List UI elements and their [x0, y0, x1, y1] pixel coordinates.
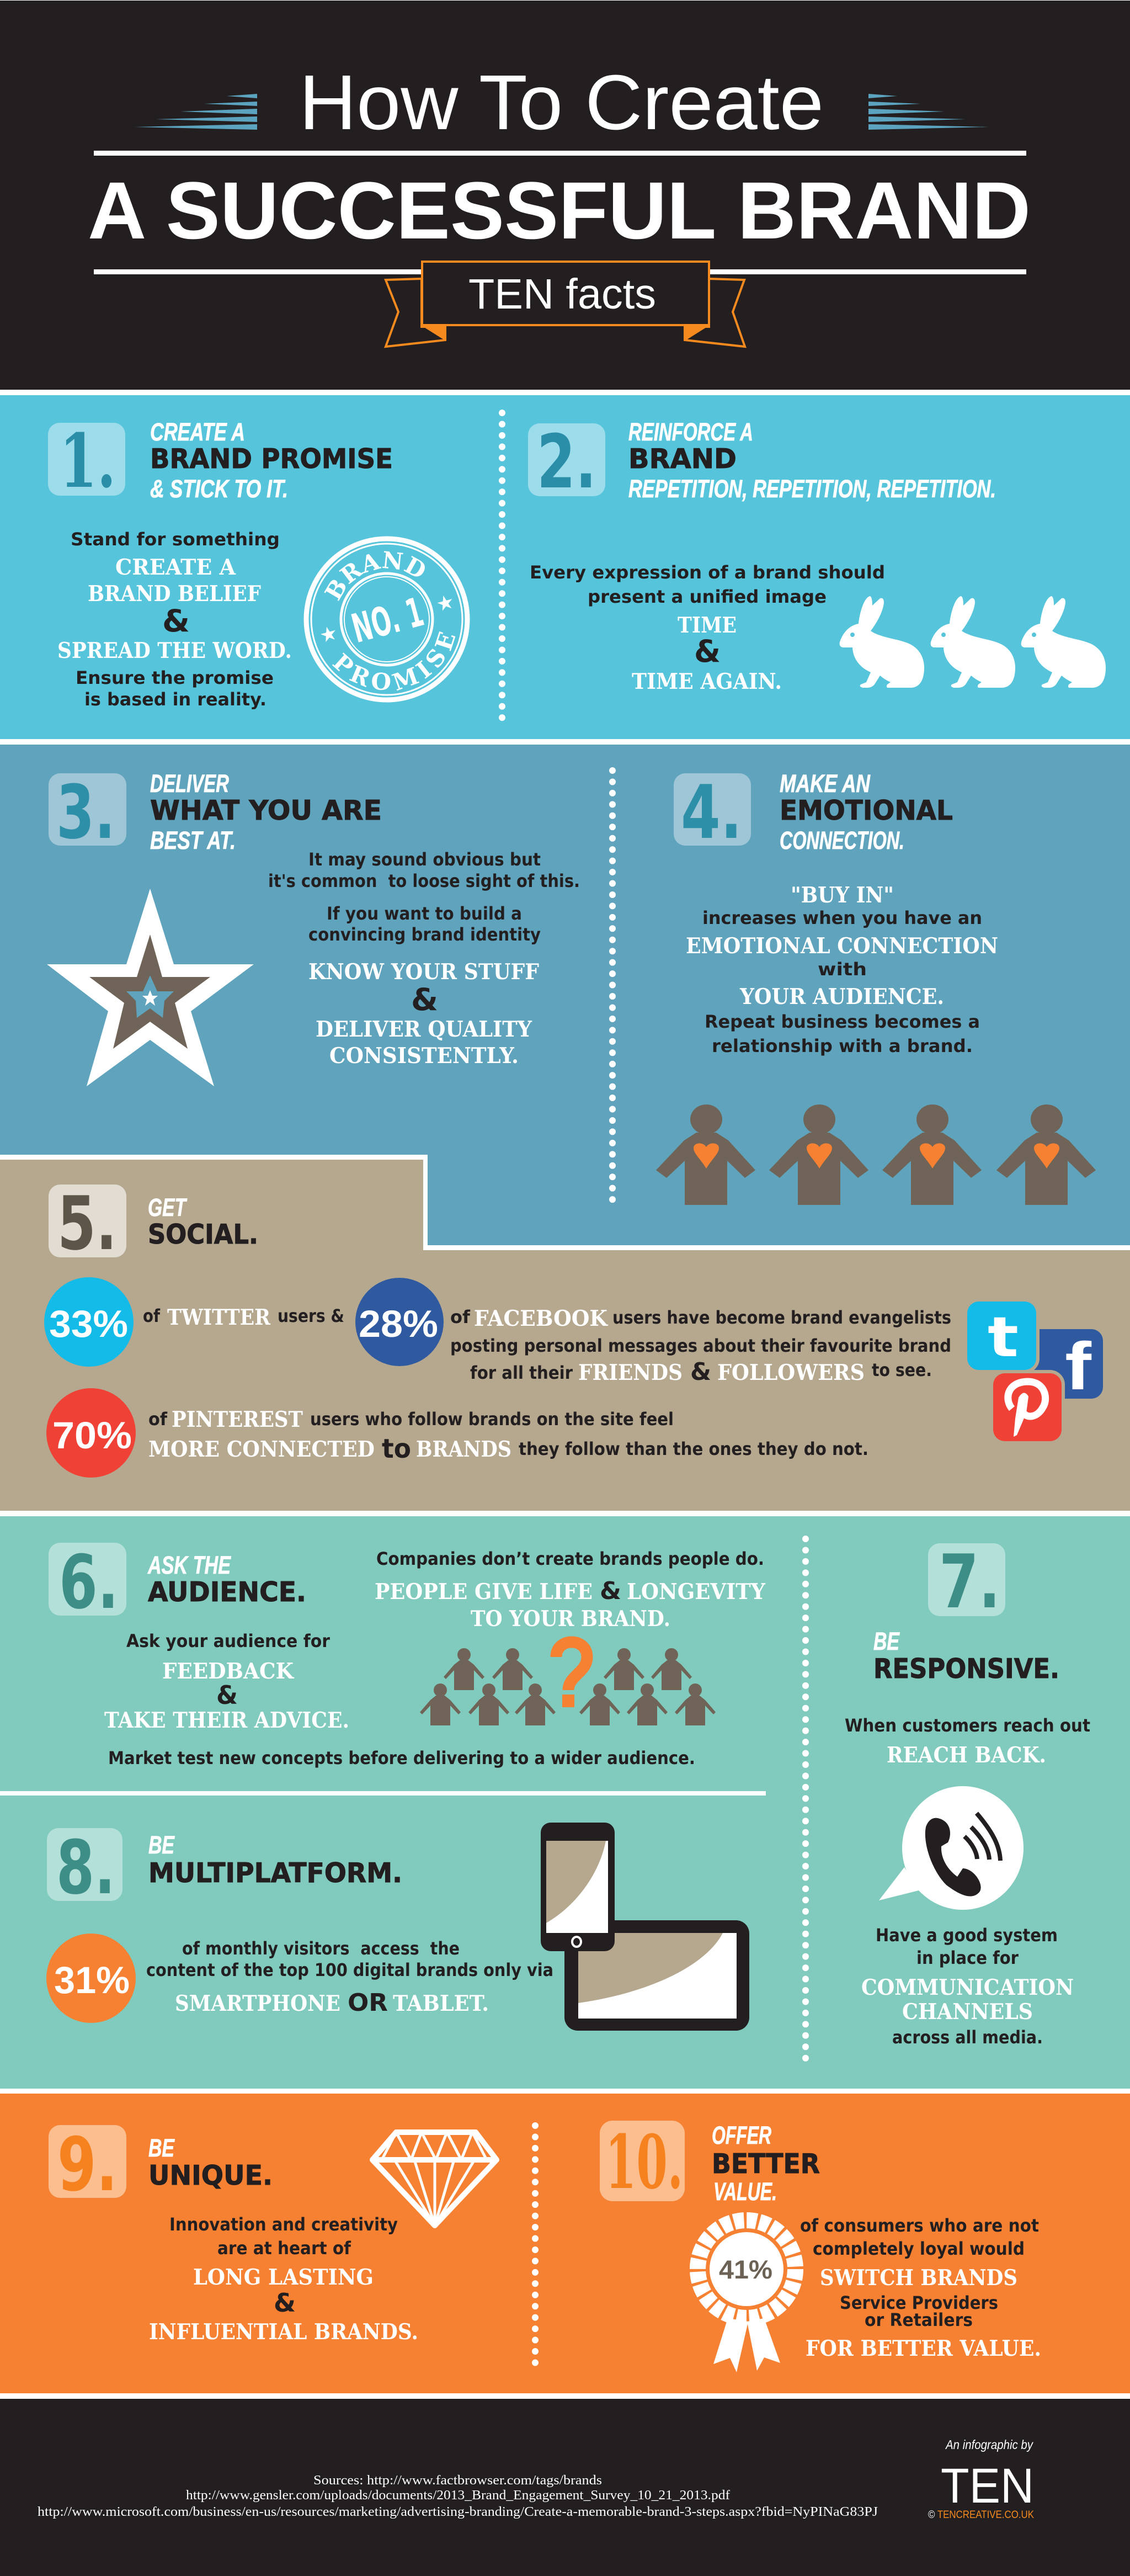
text block 7 top: REACH BACK. [887, 1743, 1046, 1768]
text block 3: If you want to build a [327, 903, 522, 924]
text block 8: OR [348, 1989, 388, 2017]
number tile 3: 3. [56, 769, 115, 856]
heading 5: SOCIAL. [148, 1219, 258, 1250]
text: pinterest users: to [382, 1433, 411, 1464]
number tile 8: 8. [56, 1825, 115, 1911]
text block 3: KNOW YOUR STUFF [308, 959, 539, 985]
text: sources: http://www.gensler.com/uploads/documents/2013_Brand_Engagement_Survey_10_21_2013.pdf [186, 2488, 730, 2503]
text block 4: Repeat business becomes a [705, 1011, 980, 1032]
icon: smartphone [541, 1823, 615, 1951]
heading 10: BETTER [712, 2148, 820, 2180]
panel: header [0, 1, 1130, 390]
text block 1: & [162, 603, 190, 639]
icon: rosette with 41 percent [699, 2221, 795, 2372]
stat: 70 percent pinterest: 70% [52, 1414, 132, 1457]
heading 2: REINFORCE A [628, 418, 753, 446]
title line: How To Create: How To Create [299, 59, 824, 146]
text block 6 top: & [600, 1577, 621, 1605]
text block 6 left: & [216, 1680, 238, 1710]
text block 6 top [375, 1548, 766, 1632]
text block 6 top: TO YOUR BRAND. [471, 1606, 670, 1632]
panel: footer [0, 2399, 1130, 2576]
text block 7 bottom: across all media. [892, 2027, 1043, 2048]
text block 7 top: When customers reach out [845, 1715, 1090, 1736]
text: facebook users: of [450, 1306, 471, 1327]
heading 4: EMOTIONAL [780, 795, 953, 826]
heading 3: WHAT YOU ARE [150, 795, 382, 826]
heading 5 [148, 1193, 258, 1250]
text block 1: CREATE A [115, 555, 236, 580]
text block 9 [149, 2214, 418, 2345]
heading 8: MULTIPLATFORM. [148, 1857, 402, 1889]
heading 7 [873, 1627, 1059, 1685]
stat: 33 percent twitter: 33% [49, 1303, 128, 1345]
text: facebook users: FOLLOWERS [717, 1360, 865, 1385]
text block 2: & [694, 634, 721, 669]
number tile 7: 7. [939, 1539, 1000, 1625]
text: pinterest users [148, 1407, 868, 1464]
text: sources: Sources: http://www.factbrowser.com/tags/brands [313, 2473, 602, 2488]
icon: social media badges: f [1065, 1329, 1091, 1404]
text block 7 bottom: Have a good system [876, 1925, 1058, 1946]
icon: people with hearts [656, 1104, 1096, 1205]
text block 2: Every expression of a brand should [530, 562, 885, 583]
text block 6 left: Ask your audience for [126, 1630, 330, 1651]
text: facebook users: FRIENDS [578, 1360, 683, 1385]
text block 9: & [274, 2288, 296, 2318]
text block 1: Stand for something [71, 529, 280, 550]
heading 7: RESPONSIVE. [873, 1653, 1059, 1685]
text block 3: CONSISTENTLY. [329, 1043, 519, 1069]
text: facebook users: & [690, 1358, 711, 1386]
text block 8: TABLET. [393, 1991, 489, 2016]
text block 3: & [411, 982, 438, 1017]
icon: phone speech bubble [879, 1786, 1024, 1910]
logo: TEN creative: © TENCREATIVE.CO.UK [928, 2509, 1034, 2521]
text block 6 top: LONGEVITY [627, 1579, 766, 1605]
number tile 10 [600, 2118, 685, 2206]
number tile 2: 2. [537, 419, 596, 505]
text block 3: convincing brand identity [308, 924, 541, 945]
heading 6: ASK THE [147, 1551, 232, 1579]
stat: 70 percent pinterest [46, 1388, 136, 1478]
text: facebook users [450, 1306, 951, 1386]
heading 8: BE [148, 1831, 175, 1859]
number tile 6: 6. [59, 1539, 119, 1626]
text: pinterest users: of [148, 1409, 168, 1430]
text block 6 left [104, 1630, 349, 1733]
heading 1 [150, 418, 393, 503]
fact 9 [49, 2122, 497, 2345]
text block 10: or Retailers [865, 2309, 973, 2330]
text block 7 bottom: CHANNELS [902, 1999, 1033, 2025]
text: facebook users: users have become brand evangelists [612, 1307, 951, 1328]
text block 9: INFLUENTIAL BRANDS. [149, 2319, 418, 2345]
text block 4: YOUR AUDIENCE. [739, 984, 944, 1010]
text block 1: SPREAD THE WORD. [57, 638, 292, 663]
heading 10 [712, 2121, 820, 2206]
number tile 1: 1. [60, 417, 116, 504]
text block 3: DELIVER QUALITY [316, 1017, 532, 1042]
text block 10: completely loyal would [813, 2238, 1025, 2259]
text: sources: http://www.microsoft.com/business/en-us/resources/marketing/advertising-branding/Create-a-memorable-brand-3-steps.aspx?fbid=NyPINaG83PJ [38, 2505, 878, 2519]
icon: brand promise stamp: BRAND [324, 551, 425, 601]
text: facebook users: posting personal messages about their favourite brand [450, 1335, 951, 1356]
icon: brand promise stamp: ★ [317, 622, 340, 648]
text block 1: BRAND BELIEF [88, 581, 261, 607]
heading 1: & STICK TO IT. [150, 475, 288, 503]
text block 4: with [818, 959, 867, 980]
heading 9: BE [148, 2134, 175, 2162]
text: twitter users: users & [278, 1305, 344, 1326]
panel: section 1 and 2 background [0, 395, 1130, 739]
text block 4: increases when you have an [702, 907, 982, 928]
text: pinterest users: PINTEREST [172, 1407, 303, 1432]
text block 10: Service Providers [840, 2292, 998, 2313]
logo: TEN creative [928, 2437, 1034, 2521]
text: market test: Market test new concepts before delivering to a wider audience. [108, 1748, 695, 1768]
fact 6 [49, 1539, 766, 1768]
text block 4: "BUY IN" [791, 883, 894, 908]
fact 3 [47, 769, 580, 1086]
heading 4: MAKE AN [780, 769, 871, 798]
fact 7 [845, 1539, 1090, 2048]
text block 9: are at heart of [217, 2238, 351, 2259]
text: twitter users: of [143, 1305, 161, 1326]
text block 8: SMARTPHONE [175, 1991, 340, 2016]
icon: brand promise stamp [303, 537, 470, 702]
heading 2: REPETITION, REPETITION, REPETITION. [628, 475, 996, 503]
heading 8 [148, 1831, 402, 1889]
stat: 31 percent [46, 1934, 136, 2023]
number tile 10: 10. [605, 2118, 683, 2206]
icon: brand promise stamp: PROMISE [332, 631, 456, 691]
ribbon text: TEN facts [468, 270, 656, 318]
text block 3: It may sound obvious but [308, 849, 541, 870]
text block 6 left: FEEDBACK [162, 1659, 295, 1684]
fact 2 [528, 418, 1106, 694]
text: pinterest users: BRANDS [416, 1437, 511, 1462]
text block 3 [268, 849, 580, 1069]
icon: rosette with 41 percent: 41% [719, 2255, 772, 2284]
heading 10: VALUE. [713, 2177, 777, 2206]
number tile 4: 4. [681, 769, 742, 856]
stat: 28 percent facebook [355, 1278, 444, 1366]
text block 7 bottom [861, 1925, 1074, 2048]
ribbon banner [386, 262, 745, 347]
text block 8: of monthly visitors access the [182, 1938, 460, 1959]
text: facebook users: FACEBOOK [474, 1306, 609, 1331]
text block 10 [800, 2215, 1041, 2361]
text: pinterest users: users who follow brands on the site feel [310, 1409, 674, 1430]
text block 2: TIME [678, 613, 737, 638]
icon: right rays [868, 94, 989, 130]
title line: A Successful Brand: A SUCCESSFUL BRAND [88, 166, 1031, 256]
icon: social media badges: t [988, 1305, 1019, 1369]
heading 10: OFFER [712, 2121, 771, 2149]
text block 7 bottom: in place for [916, 1947, 1019, 1968]
text block 1: is based in reality. [84, 689, 266, 710]
text block 4 [686, 883, 998, 1056]
icon: left rays [135, 94, 257, 130]
stat: 31 percent: 31% [54, 1959, 130, 2001]
text block 7 bottom: COMMUNICATION [861, 1975, 1074, 2000]
heading 4: CONNECTION. [780, 826, 904, 854]
icon: brand promise stamp: ★ [434, 590, 457, 617]
text block 2 [530, 562, 885, 694]
text block 1 [57, 529, 292, 710]
stat: 28 percent facebook: 28% [359, 1303, 438, 1345]
icon: brand promise stamp: NO. 1 [347, 588, 428, 652]
logo: TEN creative: An infographic by [945, 2437, 1033, 2452]
heading 3 [150, 769, 382, 854]
text block 8 [146, 1938, 553, 2017]
text block 9: LONG LASTING [193, 2265, 374, 2290]
text block 4: EMOTIONAL CONNECTION [686, 933, 998, 959]
text block 2: TIME AGAIN. [632, 669, 782, 694]
panel: section 3 and 4 background [0, 745, 1130, 1245]
fact 8 [46, 1823, 749, 2031]
panel: section 9 and 10 background [0, 2094, 1130, 2393]
icon: tablet [564, 1920, 749, 2031]
icon: diamond [372, 2132, 497, 2226]
heading 9: UNIQUE. [148, 2160, 273, 2191]
fact 1 [48, 417, 470, 710]
heading 5: GET [148, 1193, 188, 1221]
fact 10 [600, 2118, 1041, 2372]
panel: section 5 get social [0, 1155, 1130, 1511]
text block 10: SWITCH BRANDS [820, 2265, 1017, 2291]
heading 3: BEST AT. [150, 826, 236, 854]
text block 9: Innovation and creativity [169, 2214, 398, 2235]
logo: TEN creative: TEN [941, 2458, 1034, 2513]
heading 2: BRAND [628, 443, 737, 475]
text block 6 top: Companies don’t create brands people do. [376, 1548, 764, 1569]
text: twitter users [143, 1305, 344, 1330]
text block 1: Ensure the promise [76, 667, 274, 688]
text: sources [38, 2473, 878, 2519]
text block 10: FOR BETTER VALUE. [806, 2336, 1041, 2361]
heading 2 [628, 418, 996, 503]
heading 6: AUDIENCE. [148, 1576, 306, 1608]
text: twitter users: TWITTER [167, 1305, 271, 1330]
fact 4 [656, 769, 1096, 1205]
text block 6 left: TAKE THEIR ADVICE. [104, 1708, 349, 1733]
heading 1: CREATE A [150, 418, 245, 446]
icon: crowd with question mark [420, 1642, 716, 1725]
text block 7 top [845, 1715, 1090, 1768]
text block 2: present a unified image [588, 586, 827, 607]
icon: social media badges [967, 1302, 1103, 1441]
text: pinterest users: they follow than the ones they do not. [519, 1438, 868, 1459]
text block 8: content of the top 100 digital brands only via [146, 1959, 553, 1980]
text block 10: of consumers who are not [800, 2215, 1039, 2236]
text block 4: relationship with a brand. [712, 1035, 973, 1056]
number tile 9: 9. [57, 2122, 118, 2208]
icon: rabbits [840, 596, 1106, 688]
heading 9 [148, 2134, 273, 2191]
text: facebook users: for all their [470, 1362, 573, 1383]
number tile 5: 5. [57, 1181, 117, 1267]
text: facebook users: to see. [872, 1359, 932, 1380]
text: pinterest users: MORE CONNECTED [148, 1437, 375, 1462]
heading 7: BE [873, 1627, 900, 1655]
text block 3: it's common to loose sight of this. [268, 870, 580, 891]
text block 6 top: PEOPLE GIVE LIFE [375, 1579, 593, 1605]
heading 3: DELIVER [150, 769, 229, 798]
heading 4 [780, 769, 953, 854]
stat: 33 percent twitter [44, 1277, 134, 1367]
heading 1: BRAND PROMISE [150, 443, 393, 475]
icon: nested star [47, 889, 254, 1086]
heading 6 [147, 1551, 306, 1608]
panel: section 6, 7 and 8 background [0, 1516, 1130, 2089]
